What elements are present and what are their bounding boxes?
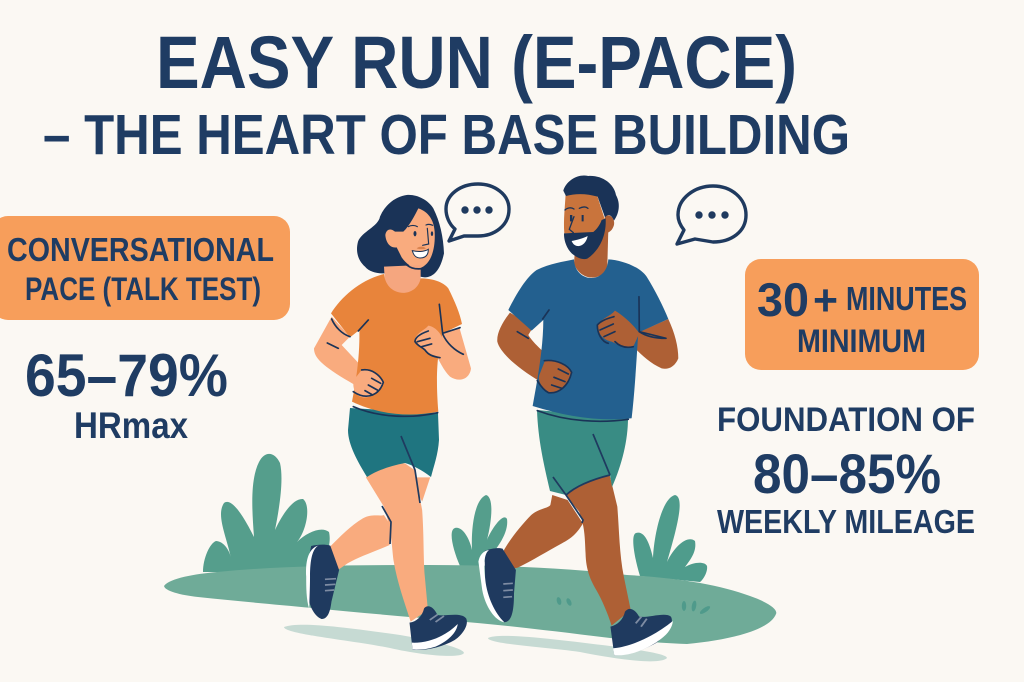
man: legs and shoes xyxy=(478,475,673,655)
panel: minimum duration: MINIMUM xyxy=(797,323,926,359)
panel: conversational pace xyxy=(0,216,290,320)
panel: conversational pace: PACE (TALK TEST) xyxy=(25,271,261,307)
icon: middle plant xyxy=(452,495,507,566)
icon: speech bubble right xyxy=(677,186,746,244)
panel: minimum duration xyxy=(745,259,979,370)
woman: shorts xyxy=(348,408,439,477)
title xyxy=(43,21,850,167)
ground xyxy=(164,565,776,644)
panel: minimum duration: 30 xyxy=(757,273,809,326)
panel: minimum duration: MINUTES xyxy=(846,280,967,317)
stat: weekly mileage foundation: FOUNDATION OF xyxy=(717,401,975,439)
icon: right plant xyxy=(633,495,707,582)
woman: legs and shoes xyxy=(306,463,467,650)
icon: left plant xyxy=(203,454,330,572)
icon: speech bubble left xyxy=(446,184,509,241)
title: – THE HEART OF BASE BUILDING xyxy=(43,103,850,167)
stat: heart rate range: HRmax xyxy=(74,405,188,446)
woman: upper body xyxy=(314,195,471,416)
man runner xyxy=(478,175,678,655)
stat: weekly mileage foundation: WEEKLY MILEAGE xyxy=(717,503,975,540)
icon: grass tufts xyxy=(556,597,711,615)
stat: weekly mileage foundation: 80–85% xyxy=(753,442,941,505)
stat: heart rate range: 65–79% xyxy=(25,342,228,409)
man: upper body xyxy=(497,175,678,421)
panel: minimum duration: + xyxy=(813,276,838,325)
stat: weekly mileage foundation xyxy=(717,401,975,540)
woman runner xyxy=(306,195,471,650)
running shadows xyxy=(284,625,667,661)
man: shorts xyxy=(537,410,628,495)
title: EASY RUN (E-PACE) xyxy=(156,21,797,104)
panel: conversational pace: CONVERSATIONAL xyxy=(7,231,274,268)
stat: heart rate range xyxy=(25,342,228,446)
